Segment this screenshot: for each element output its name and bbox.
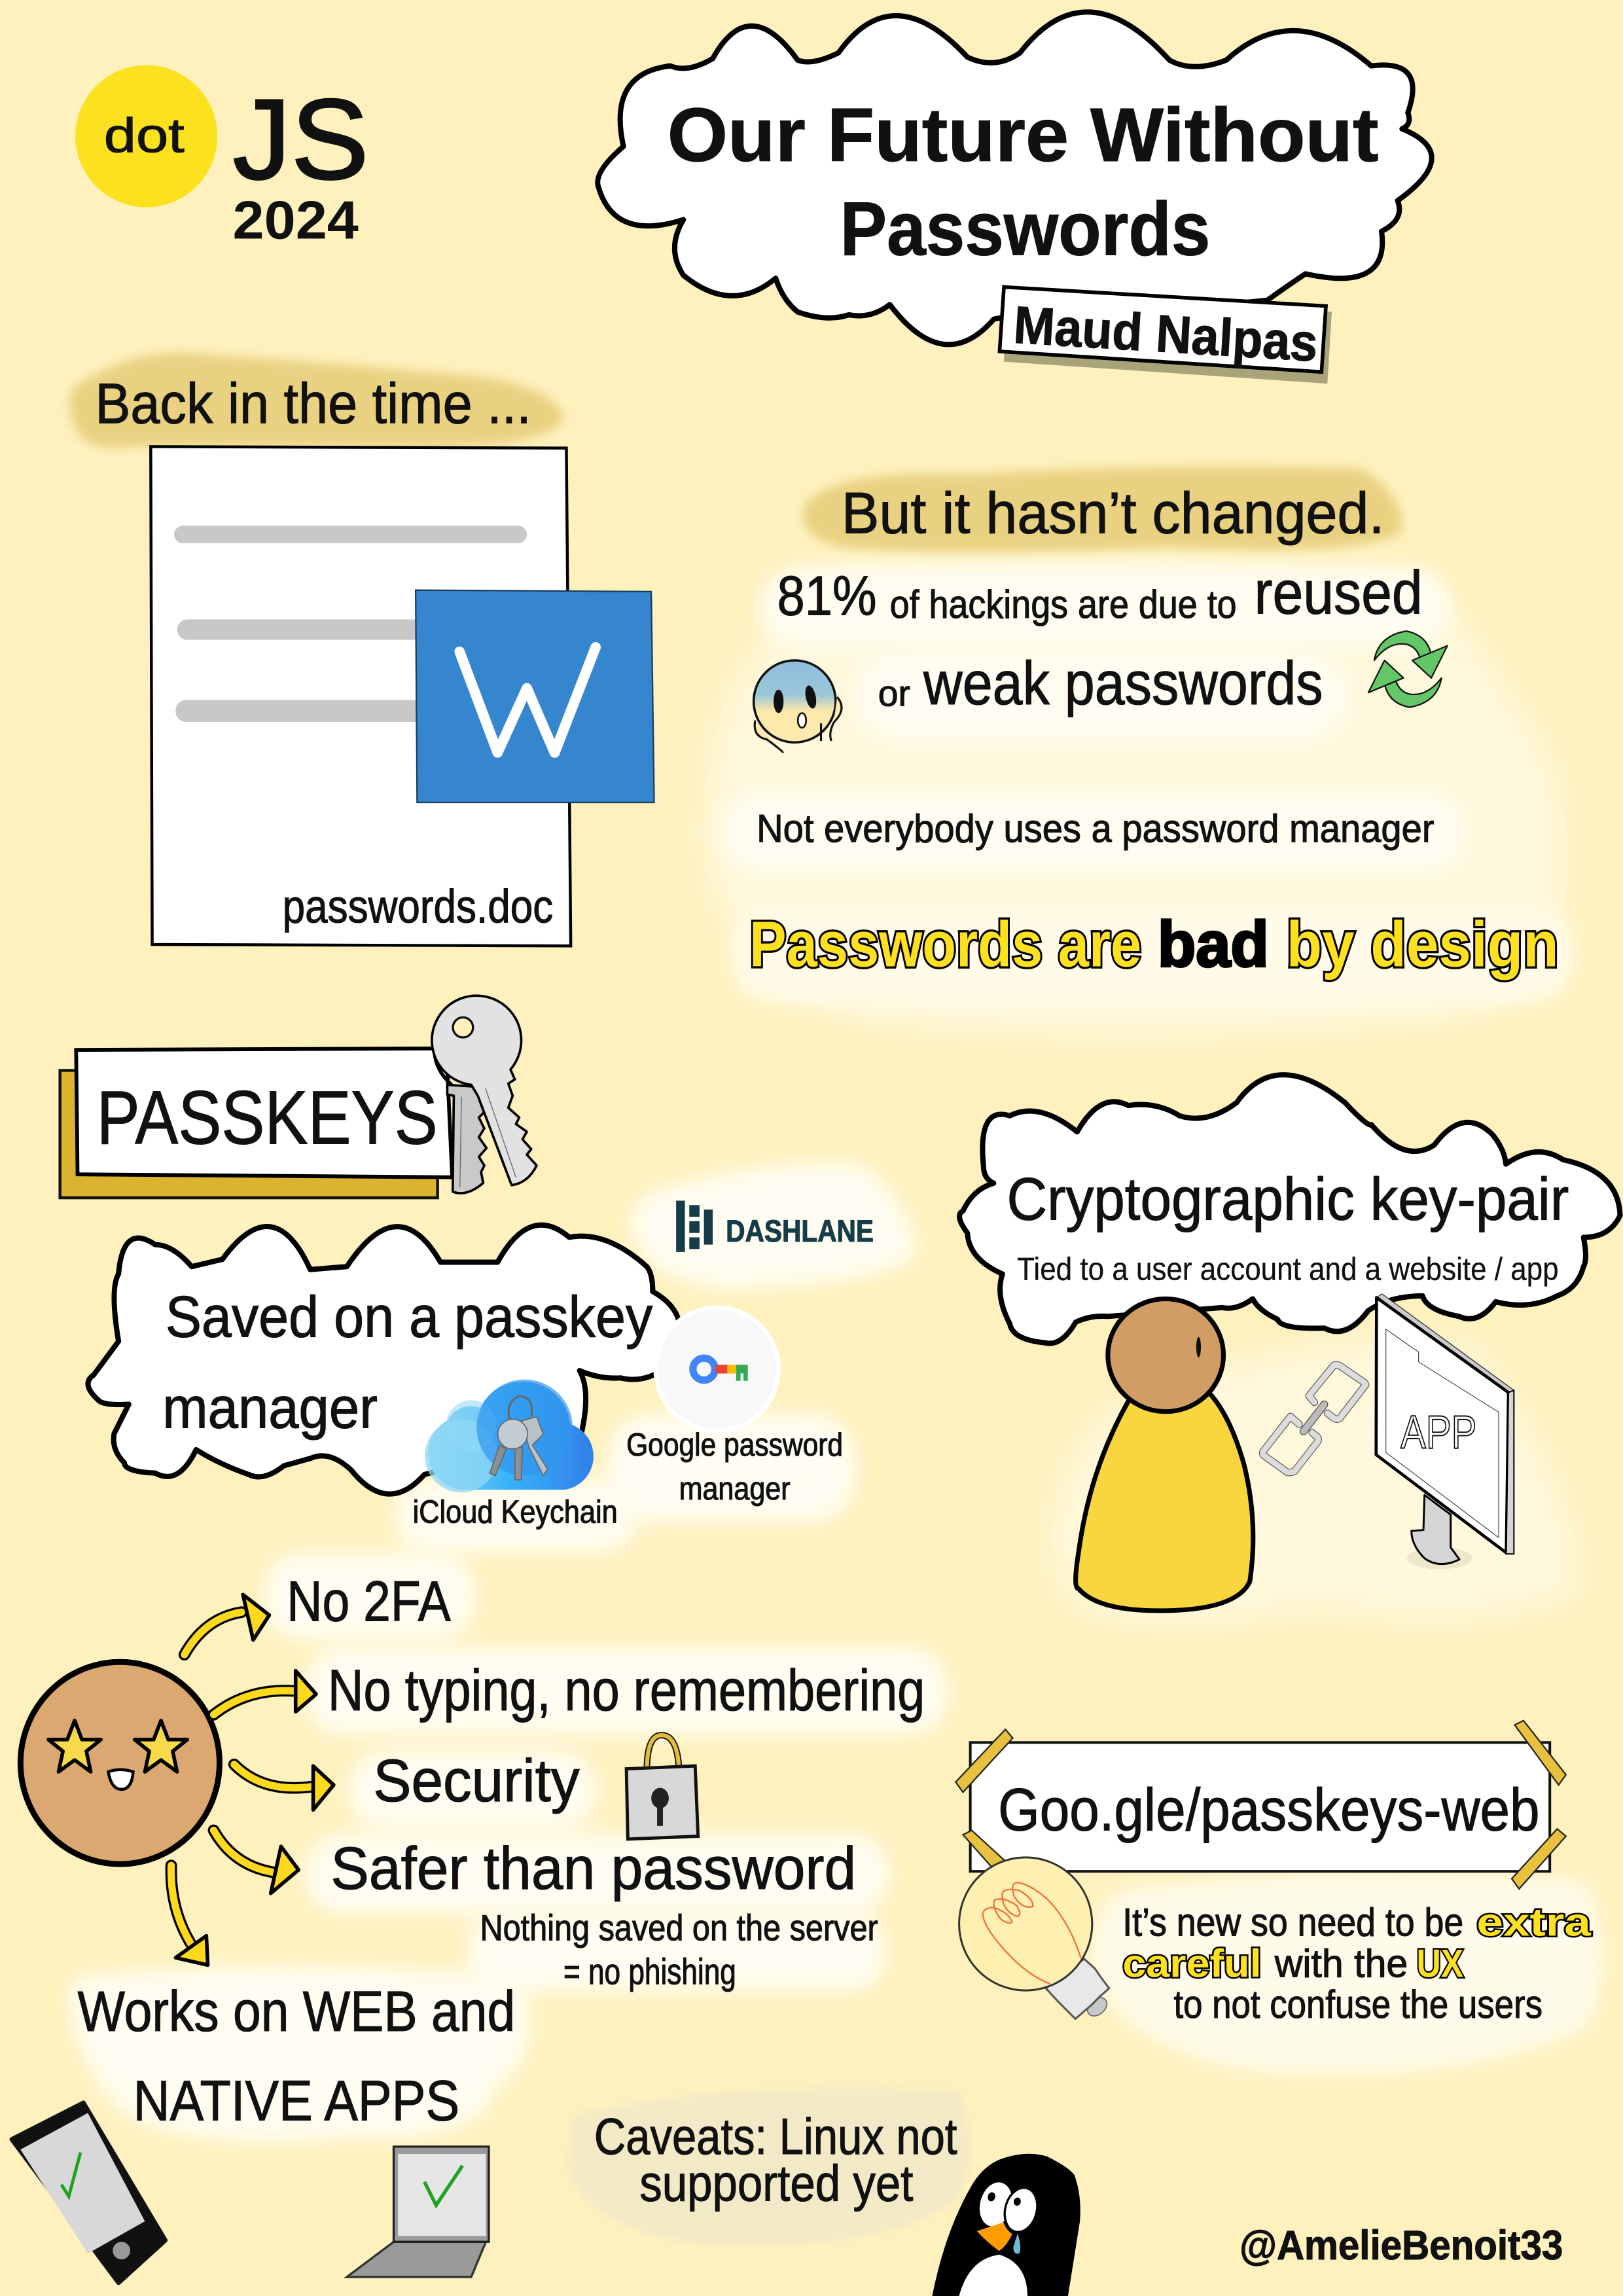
text: works on web and native apps: NATIVE APPS (133, 2070, 459, 2133)
callout: caveats (568, 2088, 969, 2245)
glow: benefit items (70, 1552, 948, 2142)
logo: dotJS 2024: dot (104, 109, 185, 163)
stat: weak passwords: weak passwords (923, 649, 1323, 717)
heading: PASSKEYS: PASSKEYS (97, 1075, 438, 1160)
glow: bulb text (1090, 1872, 1603, 2075)
logo: Google password manager (656, 1308, 779, 1431)
mouth (108, 1770, 133, 1789)
callout: caveats: supported yet (639, 2155, 914, 2212)
text: passwords are bad by design (749, 908, 1559, 980)
speaker name card: Maud Nalpas (1012, 296, 1319, 373)
author handle: @AmelieBenoit33 (1240, 2223, 1563, 2269)
text: nothing saved on the server: = no phishing (563, 1950, 736, 1992)
heading: PASSKEYS (60, 1049, 452, 1198)
star eye right (135, 1721, 187, 1772)
text: works on web and native apps (78, 1980, 515, 2133)
title cloud (597, 12, 1432, 344)
logo: dotJS 2024: 2024 (233, 190, 359, 251)
cloud: cryptographic key-pair (959, 1075, 1620, 1344)
star eye left (48, 1721, 101, 1772)
icon: phone (12, 2103, 166, 2283)
text: nothing saved on the server (480, 1907, 878, 1992)
soft panel glow: stats (702, 560, 1573, 1038)
text: Security: Security (373, 1748, 580, 1814)
stat: 81 percent (777, 558, 1423, 628)
stat: 81 percent: reused (1254, 558, 1423, 626)
logo: dotJS 2024: JS (233, 75, 369, 203)
arrow to No typing (213, 1671, 316, 1715)
heading: But it hasn't changed: But it hasn’t changed. (842, 480, 1384, 545)
stat: 81 percent: 81% (777, 565, 877, 628)
title text (668, 92, 1379, 271)
arrow to No 2FA (185, 1594, 269, 1655)
text: Safer than password: Safer than password (330, 1835, 856, 1902)
text: passwords are bad by design: by design (1287, 908, 1559, 980)
text: nothing saved on the server: Nothing saved on the server (480, 1907, 878, 1948)
text: No typing, no remembering: No typing, no remembering (328, 1657, 925, 1723)
arrow to Safer than password (213, 1831, 298, 1893)
stat: 81 percent: of hackings are due to (890, 582, 1237, 626)
text: extra careful with the UX: to not confuse the users (1173, 1982, 1543, 2026)
label: Google password manager: Google password (626, 1427, 843, 1463)
document: passwords.doc (151, 446, 571, 946)
heading: Back in the time: Back in the time ... (95, 372, 531, 436)
label: Google password manager: manager (679, 1471, 791, 1507)
glow: person and app (1050, 1340, 1580, 1626)
text: extra careful with the UX: UX (1417, 1941, 1463, 1985)
illustration: app screen on stand (1376, 1294, 1514, 1570)
link card: goo.gle/passkeys-web (955, 1721, 1566, 1889)
icon: keys (432, 996, 537, 1193)
illustration: person (1076, 1299, 1253, 1611)
title text: Our Future Without (668, 92, 1379, 177)
icon: light bulb (959, 1857, 1111, 2020)
logo: Dashlane: DASHLANE (726, 1213, 874, 1248)
heading: Back in the time (70, 353, 563, 448)
text: No 2FA: No 2FA (287, 1570, 451, 1634)
logo: dotJS 2024 (75, 65, 369, 251)
text: extra careful with the UX: careful (1122, 1941, 1262, 1985)
text: extra careful with the UX: extra (1476, 1900, 1591, 1945)
arrow to Security (234, 1765, 334, 1810)
icon: chain link (1263, 1365, 1366, 1473)
cloud: saved on a passkey manager (88, 1225, 680, 1494)
icon: padlock (626, 1735, 698, 1839)
icon: Word file (416, 590, 654, 802)
text: passwords are bad by design: bad (1158, 908, 1269, 980)
cloud text: manager (162, 1374, 378, 1440)
icon: laptop (347, 2147, 489, 2277)
label: APP: APP (1400, 1407, 1476, 1459)
icon: fearful face (754, 660, 842, 753)
title text: Passwords (840, 186, 1210, 271)
text: passwords are bad by design: Passwords are (749, 908, 1141, 980)
text: not everybody uses a manager: Not everybody uses a password manager (757, 806, 1435, 850)
text: extra careful with the UX: It’s new so need to be (1122, 1900, 1463, 1945)
illustration: penguin (932, 2154, 1080, 2296)
text: extra careful with the UX (1122, 1900, 1591, 2026)
cloud subtext: Tied to a user account and a website / app (1017, 1251, 1559, 1287)
document lines (174, 526, 527, 722)
label: Google password manager (626, 1427, 843, 1507)
tape corners (955, 1721, 1566, 1889)
text: works on web and native apps: Works on WEB and (78, 1980, 515, 2043)
callout: caveats: Caveats: Linux not (594, 2108, 957, 2165)
smiling face with star eyes (20, 1662, 219, 1864)
link text: Goo.gle/passkeys-web (998, 1777, 1540, 1844)
cloud text (162, 1284, 653, 1440)
glow: password managers (395, 1163, 916, 1552)
cloud text: Saved on a passkey (166, 1284, 653, 1350)
stat: weak passwords: or (878, 672, 910, 713)
text: extra careful with the UX: with the (1274, 1941, 1408, 1985)
filename: passwords.doc (283, 880, 553, 933)
cloud heading: Cryptographic key-pair (1007, 1166, 1569, 1233)
logo: Dashlane (676, 1201, 874, 1252)
arrow to Works on web (171, 1865, 208, 1965)
label: iCloud Keychain: iCloud Keychain (413, 1494, 618, 1530)
icon: iCloud keychain (425, 1380, 594, 1492)
icon: recycle arrows (1368, 631, 1448, 708)
